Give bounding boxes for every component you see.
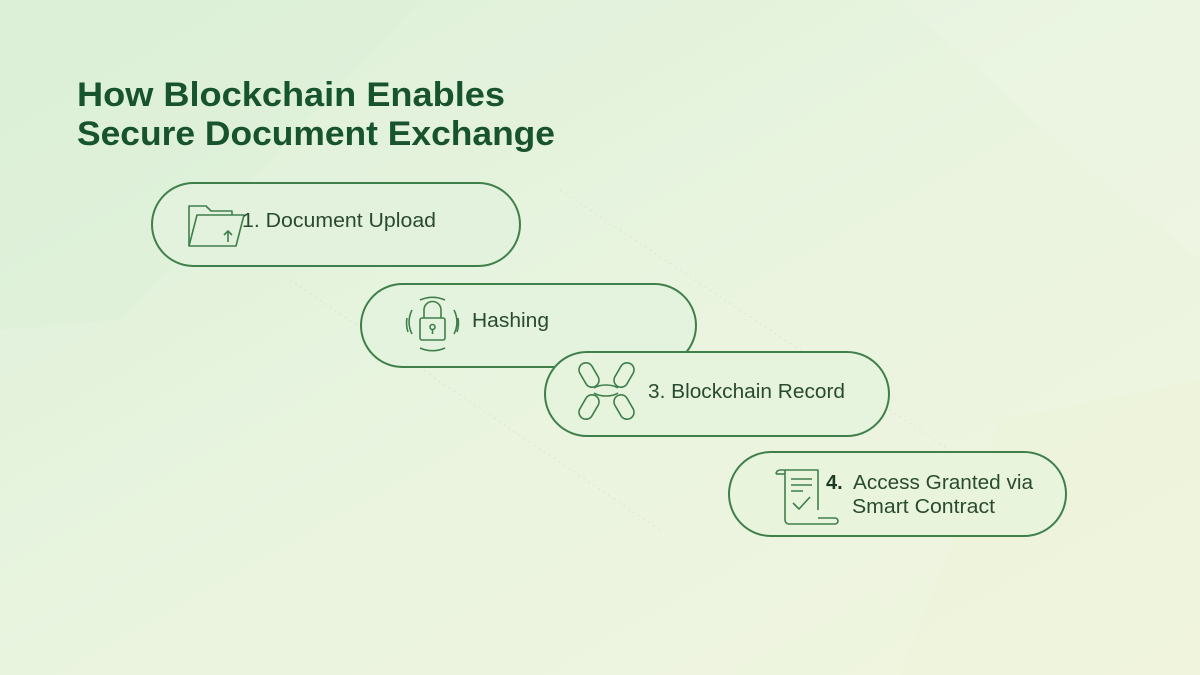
title xyxy=(77,76,555,153)
icon: folder upload xyxy=(189,206,244,246)
step 1: Document Upload xyxy=(152,183,520,266)
step 4: Access Granted via Smart Contract: Smart Contract xyxy=(852,496,995,518)
step 3: Blockchain Record xyxy=(545,352,889,436)
title: How Blockchain Enables xyxy=(77,76,505,114)
step 4: Access Granted via Smart Contract xyxy=(729,452,1066,536)
step 3: Blockchain Record: 3. Blockchain Record xyxy=(648,381,845,403)
icon: padlock xyxy=(407,297,458,351)
icon: chain links xyxy=(576,360,637,422)
step 4: Access Granted via Smart Contract: Access Granted via xyxy=(853,472,1034,494)
step 2: Hashing: Hashing xyxy=(472,310,549,332)
step 2: Hashing xyxy=(361,284,696,367)
icon: contract scroll xyxy=(776,470,838,524)
step 4: Access Granted via Smart Contract: 4. xyxy=(826,472,843,494)
step 1: Document Upload: 1. Document Upload xyxy=(242,210,436,232)
title: Secure Document Exchange xyxy=(77,115,555,153)
